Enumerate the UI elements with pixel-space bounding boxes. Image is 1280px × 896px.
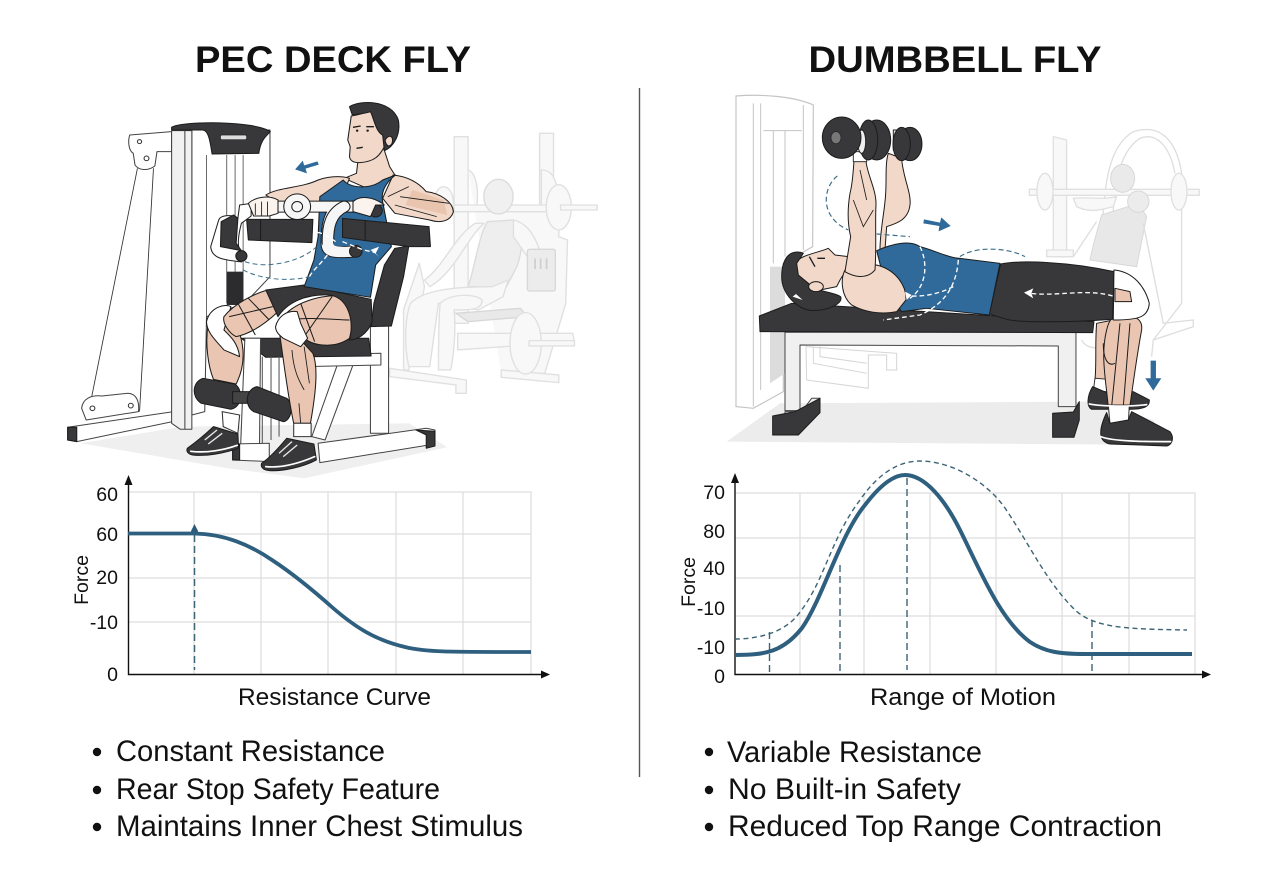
- shorts: [989, 262, 1114, 322]
- y tick labels: 0: [107, 664, 118, 686]
- title: dumbbell fly: DUMBBELL FLY: [808, 38, 1102, 80]
- athlete: dumbbell fly: [782, 161, 1172, 446]
- marker: [191, 524, 198, 534]
- head: [348, 103, 399, 163]
- y tick labels: 70: [703, 482, 725, 504]
- arms and shoulders: [266, 177, 350, 203]
- y tick labels: 60: [96, 484, 118, 506]
- near arm: [845, 161, 876, 276]
- knee: [1113, 270, 1149, 320]
- shoulder and upper chest: [842, 265, 906, 313]
- far arm: [880, 153, 910, 250]
- y tick labels: -10: [697, 598, 725, 620]
- x axis label: Range of Motion: [870, 684, 1056, 711]
- y tick labels: -10: [697, 637, 725, 659]
- y tick labels: 40: [703, 558, 725, 580]
- background gym figure on rack: [1029, 130, 1199, 357]
- bullet list: dumbbell: No Built-in Safety: [728, 773, 961, 806]
- y tick labels: -10: [90, 612, 118, 634]
- machine: main column and top cap: [172, 123, 270, 429]
- axis arrowheads: [731, 473, 1211, 678]
- title: pec deck fly: PEC DECK FLY: [195, 38, 471, 80]
- bullet list: pec deck: [93, 735, 523, 843]
- machine: backrest, seat and frame: [233, 246, 435, 463]
- bullet list: dumbbell: Reduced Top Range Contraction: [728, 810, 1162, 843]
- background rack left: [736, 95, 897, 408]
- shoes: [187, 427, 316, 471]
- shirt: [304, 175, 396, 297]
- y tick labels: 0: [714, 666, 725, 688]
- centre divider line: [638, 88, 640, 777]
- y tick labels: [697, 482, 725, 688]
- y tick labels: 60: [96, 524, 118, 546]
- dashed vertical markers: [770, 478, 1092, 673]
- shorts: [266, 285, 372, 340]
- illustration: dumbbell fly: [727, 95, 1199, 446]
- marker dashed line: [194, 535, 196, 670]
- athlete: pec deck: [187, 103, 453, 471]
- floor shadow: [81, 423, 447, 478]
- chart: pec deck resistance curve: [71, 475, 550, 711]
- y axis label: Force: [71, 555, 93, 605]
- dashed upper curve: [735, 461, 1187, 639]
- bench: [759, 303, 1094, 437]
- motion paths: [309, 232, 376, 277]
- bullet list: pec deck: Maintains Inner Chest Stimulus: [116, 810, 523, 843]
- chart grid: [735, 493, 1195, 675]
- machine: arm pads and handles: [211, 197, 430, 279]
- neck: [344, 145, 396, 188]
- chart grid: [128, 492, 531, 675]
- floor shadow: [727, 402, 1167, 445]
- blue arrow right: [923, 217, 951, 231]
- motion paths: [883, 247, 958, 320]
- illustration: pec deck fly: [68, 103, 597, 478]
- leg rollers: [194, 378, 291, 422]
- shirt: [877, 243, 1000, 315]
- x axis label: Resistance Curve: [238, 684, 431, 711]
- head and hair: [782, 248, 848, 311]
- bullet list: pec deck: Rear Stop Safety Feature: [116, 773, 440, 806]
- solid force curve: [735, 475, 1192, 655]
- y tick labels: [90, 484, 118, 686]
- dumbbells: [822, 117, 922, 162]
- bullet list: pec deck: Constant Resistance: [116, 735, 385, 768]
- y tick labels: 80: [703, 521, 725, 543]
- bullet list: dumbbell: [705, 736, 1162, 843]
- axis arrowheads: [124, 475, 550, 678]
- blue arrow down: [1145, 361, 1161, 391]
- chart axes: [735, 480, 1202, 674]
- bullet list: dumbbell: Variable Resistance: [727, 736, 982, 769]
- y tick labels: 20: [96, 567, 118, 589]
- resistance curve: [128, 534, 531, 652]
- blue motion arrow: [295, 161, 319, 173]
- lower legs and shoes: [1088, 315, 1172, 446]
- chart: dumbbell range of motion: [678, 461, 1211, 711]
- background gym figure on machine: [390, 133, 597, 393]
- y axis label: Force: [678, 557, 700, 607]
- machine: pulley arm and cables: [68, 132, 180, 442]
- chart axes: [128, 480, 542, 674]
- legs: [206, 290, 352, 437]
